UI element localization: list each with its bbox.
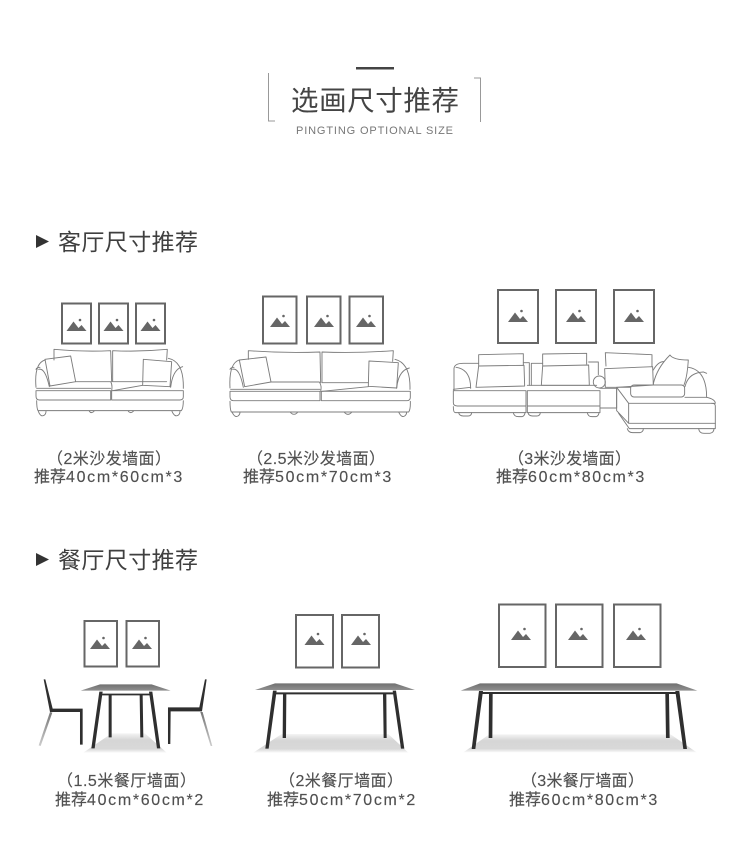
caption xyxy=(496,450,646,486)
caption: 推荐60cm*80cm*3 xyxy=(496,468,646,486)
sectional sofa outline xyxy=(453,353,715,433)
wall frames xyxy=(499,604,660,667)
section heading: living room: 客厅尺寸推荐 xyxy=(58,229,198,255)
title: 选画尺寸推荐 xyxy=(291,85,459,116)
sofa outline xyxy=(36,349,183,416)
panel: 1.5m dining xyxy=(39,621,212,809)
caption: （3米沙发墙面） xyxy=(508,450,631,468)
wall frames xyxy=(84,621,159,666)
panel: 2.5m sofa xyxy=(230,296,410,486)
dining table xyxy=(461,683,697,752)
wall frames xyxy=(263,296,383,344)
caption xyxy=(267,772,417,809)
wall frames xyxy=(62,304,165,344)
panel: 3m sofa xyxy=(453,290,715,486)
sofa outline xyxy=(230,351,410,416)
panel: 2m dining xyxy=(253,615,417,809)
wall frames xyxy=(498,290,654,343)
header xyxy=(268,67,480,137)
left chair xyxy=(44,679,83,745)
caption: 推荐40cm*60cm*3 xyxy=(34,468,184,486)
caption: 推荐50cm*70cm*3 xyxy=(243,468,393,486)
dining table xyxy=(253,683,415,753)
wall frames xyxy=(296,615,379,668)
subtitle: PINGTING OPTIONAL SIZE xyxy=(296,125,453,137)
caption xyxy=(34,450,184,486)
caption: （2.5米沙发墙面） xyxy=(247,450,385,468)
caption: 推荐60cm*80cm*3 xyxy=(509,791,659,809)
caption: （2米沙发墙面） xyxy=(47,450,171,468)
caption: （2米餐厅墙面） xyxy=(279,772,403,790)
caption: 推荐50cm*70cm*2 xyxy=(267,791,417,809)
caption: （3米餐厅墙面） xyxy=(521,772,644,790)
section heading: dining room: 餐厅尺寸推荐 xyxy=(58,547,198,573)
caption: （1.5米餐厅墙面） xyxy=(57,772,196,790)
panel: 2m sofa xyxy=(34,304,184,486)
caption xyxy=(509,772,659,809)
panel: 3m dining xyxy=(461,604,697,809)
caption: 推荐40cm*60cm*2 xyxy=(55,791,205,809)
right chair xyxy=(168,679,207,744)
table and chairs xyxy=(39,679,212,753)
caption xyxy=(243,450,393,486)
caption xyxy=(55,772,205,809)
